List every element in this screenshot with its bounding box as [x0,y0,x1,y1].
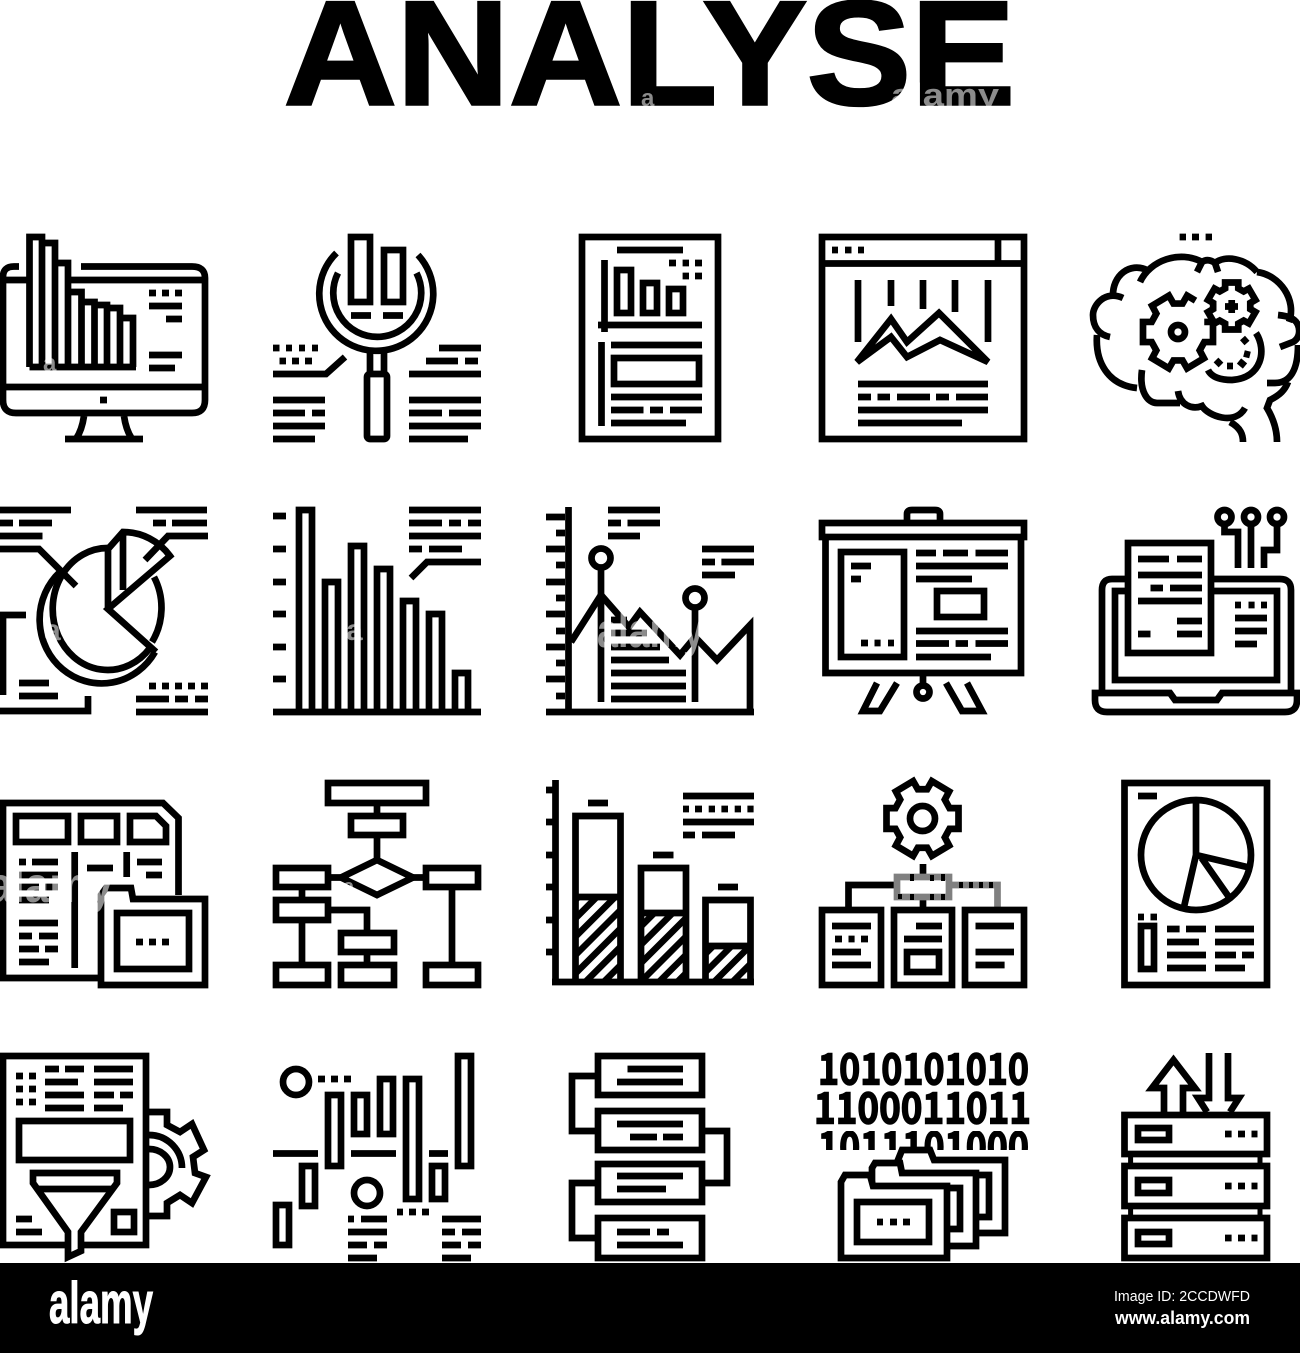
icon: pie chart with leaders [0,510,208,712]
line chart text [611,620,686,699]
icon: document with pie chart [1124,783,1267,985]
icon: report document with bar chart [582,237,718,439]
circuit nodes [1218,510,1232,524]
watermark overlay: a [44,614,61,647]
pie labels [0,510,208,712]
binary rows [816,1052,1030,1150]
icon: gear over hierarchy [822,781,1024,985]
icon: presentation board [822,510,1024,711]
watermark overlay: a [343,876,355,898]
easel legs [863,676,982,711]
brain gears [1143,296,1213,368]
binary rows: 1100011011 [814,1074,1031,1136]
hatched bars [578,897,618,982]
document on laptop [1128,543,1211,653]
icon: scattered bars and circles [273,1056,481,1258]
icon: browser window with mountain chart [822,237,1024,439]
magnifier side text [273,348,481,439]
folder [101,888,205,985]
icon: binary code with folders [814,1036,1031,1258]
icon: brain with gears [1093,237,1299,442]
watermark overlay: a [43,350,57,377]
icon: line chart with pins [546,507,754,712]
watermark overlay: a [641,85,655,112]
binary rows: 1010101010 [818,1036,1029,1098]
footer logo: alamy [49,1271,153,1336]
funnel [33,1173,117,1257]
icon: linked boxes [572,1056,727,1258]
icon: stacked bar chart [546,780,754,985]
watermark overlay [0,77,999,913]
hierarchy boxes [822,910,881,985]
watermark overlay: alamy [597,605,704,658]
image id: Image ID: 2CCDWFD [1114,1288,1250,1305]
footer bar [0,1263,1300,1353]
icon: flowchart [276,783,478,985]
watermark overlay: a [346,614,363,647]
website: www.alamy.com [1114,1308,1250,1328]
monitor bars [30,237,136,367]
icon: server stack with arrows [1124,1053,1267,1258]
watermark overlay: alamy [891,77,999,113]
icon: column chart [273,510,481,712]
column chart text [409,510,481,578]
icon: monitor with bar chart [3,237,205,439]
front folder [841,1175,947,1258]
icon: magnifying glass with bars [273,237,481,439]
icon: laptop with document and circuit [1095,510,1297,712]
icon: funnel document with gear [3,1056,206,1257]
binary rows: 1011101000 [818,1114,1029,1176]
icon: document with folder [3,803,205,985]
